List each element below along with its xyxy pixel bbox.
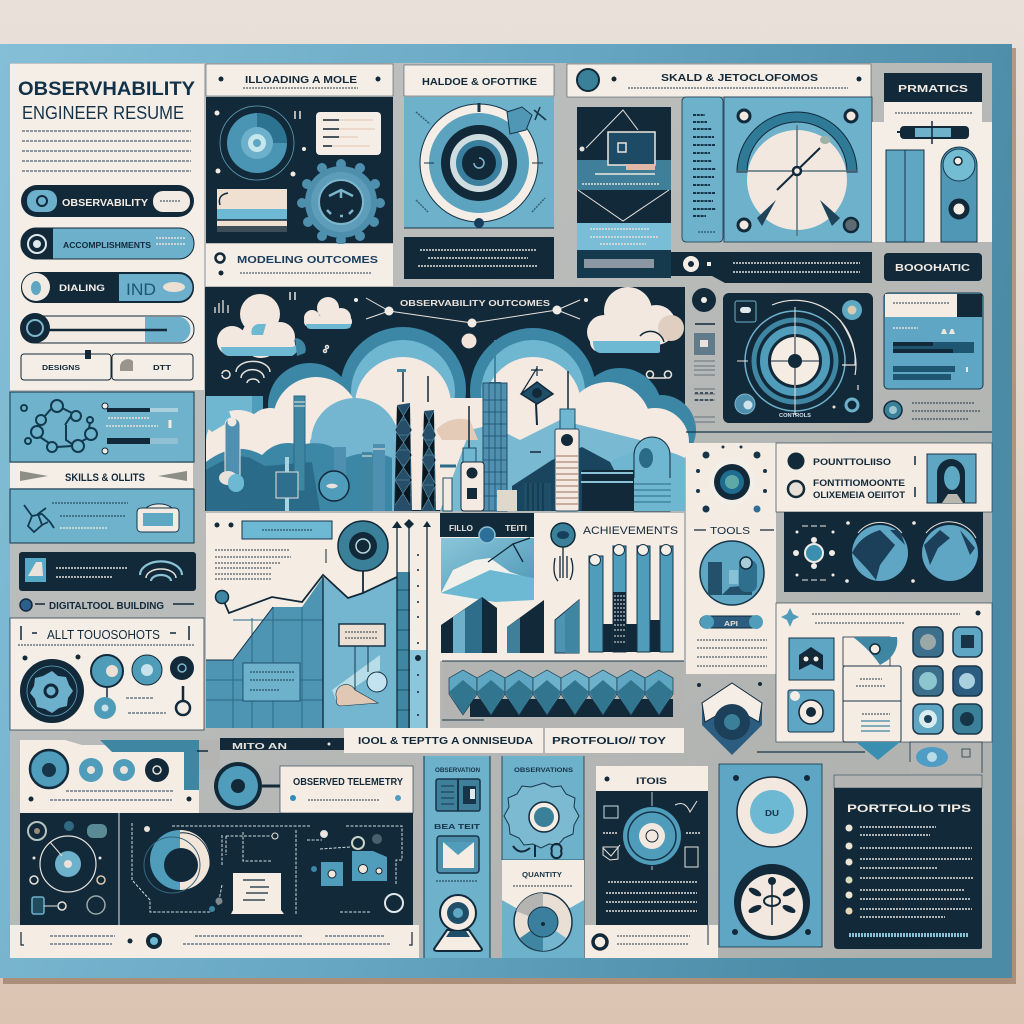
profile text: POUNTTOLIISO [813, 457, 891, 468]
icon: radial lens [696, 446, 767, 512]
label: dark mini bar: MITO AN [232, 741, 287, 751]
heading: skills: SKILLS & OLLITS [65, 472, 145, 484]
panel: sales header [567, 64, 871, 97]
icon: open book [436, 779, 480, 811]
icon: large ring [214, 762, 280, 810]
title: OBSERVHABILITY [18, 79, 195, 100]
trend line [222, 525, 427, 730]
heading: skills [10, 463, 193, 488]
icon: wifi [215, 292, 671, 383]
band: shield row [442, 661, 684, 728]
icon: ring [788, 452, 804, 470]
pill: dialing: DIALING [59, 283, 105, 293]
panel: achievements: FILLO [449, 524, 473, 533]
profile text: FONTITIOMOONTE [813, 478, 905, 489]
icon: lens large [30, 750, 68, 788]
heading: city: OBSERVABILITY OUTCOMES [400, 298, 550, 308]
icon: white dial [732, 775, 811, 935]
label: portfolio [545, 728, 684, 753]
label: bookmarks [884, 253, 982, 281]
skyline towers [219, 369, 428, 511]
dome and pipes [581, 437, 671, 511]
box: designs: DESIGNS [42, 365, 80, 372]
pill: dialing [21, 272, 194, 303]
panel: metrics chart [206, 513, 440, 730]
panel: observability header: HALDOE & OFOTTIKE [422, 77, 537, 88]
control pill [700, 615, 763, 629]
label: digital building [20, 599, 194, 612]
panel: metric card [884, 293, 983, 389]
icon: gear [297, 159, 385, 245]
icon: globe one [845, 521, 916, 583]
title: ENGINEER RESUME [22, 103, 184, 123]
icon: dark badge [692, 288, 716, 312]
icon: mail [437, 836, 479, 873]
dial group [28, 821, 107, 914]
panel: observed telemetry [280, 766, 413, 813]
app icon grid [913, 627, 982, 734]
pill: progress slider [20, 313, 194, 343]
card: metrics lines [316, 112, 381, 155]
avatar [927, 454, 976, 503]
clouds [217, 287, 684, 358]
panel: modeling outcomes: MODELING OUTCOMES [237, 255, 378, 266]
icon: gear dial [20, 659, 84, 723]
card: stacked [217, 189, 287, 232]
panel: pragmatics label [884, 73, 982, 102]
pill: achievements: ACCOMPLISHMENTS [63, 240, 151, 250]
panel: modeling header [206, 64, 393, 96]
chart label [242, 521, 332, 539]
icon: central lens [603, 792, 701, 870]
label: tools and testing: IOOL & TEPTTG A ONNISEUDA [358, 735, 533, 747]
panel: portfolio profile [776, 443, 992, 512]
panel: observed telemetry: OBSERVED TELEMETRY [293, 777, 403, 788]
banner: digital tools [19, 552, 196, 591]
panel: achievements: TEITI [505, 524, 527, 533]
panel: dial sidebar [719, 764, 822, 947]
profile text: OLIXEMEIA OEIITOT [813, 490, 905, 501]
connector line [757, 751, 865, 753]
sentinel diamond marker [521, 366, 553, 452]
icon: white dial: DU [765, 809, 779, 818]
panel: itops card [585, 766, 718, 958]
panel: portfolio tips [834, 775, 982, 949]
label: portfolio: PROTFOLIO// TOY [552, 735, 666, 747]
card: quantity [502, 860, 584, 958]
box: dtt: DTT [153, 363, 171, 372]
label: digital building: DIGITALTOOL BUILDING [49, 601, 164, 612]
panel: modeling header: ILLOADING A MOLE [245, 75, 357, 86]
label: bookmarks: BOOOHATIC [895, 263, 970, 274]
icon: target ring [788, 481, 804, 497]
panel: blue sidebar: BEA TEIT [434, 824, 481, 831]
chart notes [215, 550, 291, 579]
control pill: API [724, 621, 738, 628]
panel: dark monitor screen [577, 107, 671, 278]
panel: pragmatics label: PRMATICS [898, 84, 968, 95]
panel: achievements [440, 513, 684, 661]
panel: globes [784, 512, 983, 592]
panel: city skyline [205, 287, 696, 511]
puzzle icons [311, 834, 403, 912]
pill: observability: OBSERVABILITY [62, 197, 148, 209]
bar: stats text [671, 252, 872, 283]
panel: portfolio tips: PORTFOLIO TIPS [847, 803, 971, 815]
icon: globe two [922, 522, 978, 581]
icon: key badge [551, 523, 575, 581]
tall glass tower [483, 340, 517, 511]
thermometer bars [589, 544, 673, 652]
profile text [813, 456, 915, 501]
circuit lines [132, 823, 402, 914]
label: tools and testing [344, 728, 543, 753]
panel: observability text [404, 237, 554, 279]
heading: tools [694, 525, 774, 537]
panel: telemetry dashboard [20, 813, 413, 925]
panel: text strip [682, 97, 723, 242]
card: camera [788, 690, 834, 732]
tips bullet list [846, 824, 973, 935]
box: designs [21, 350, 111, 380]
hills [206, 398, 685, 511]
panel: monitoring target: CONTROLS [779, 413, 811, 419]
picture: mountains [441, 527, 534, 605]
summary text block [22, 131, 191, 171]
small towers [440, 371, 579, 511]
icon: radial dial [220, 106, 294, 180]
badge with text [884, 401, 980, 419]
folded note [843, 637, 901, 742]
icon: round badge [577, 69, 599, 91]
pie chart [514, 893, 572, 951]
connector network [354, 298, 588, 328]
panel: tools [686, 443, 776, 674]
panel: title and profile column [10, 64, 204, 390]
pill: dialing: IND [126, 280, 156, 299]
heading: achievements: ACHIEVEMENTS [583, 525, 678, 537]
icon: gear with ring [504, 783, 579, 858]
icon: network symbol [734, 864, 810, 940]
panel: observability header [404, 65, 554, 96]
card: mask [789, 638, 834, 680]
panel: all touchpoints [10, 618, 204, 730]
panel: gauge [724, 97, 872, 242]
note card [231, 873, 284, 914]
background arches [268, 327, 696, 465]
note box [243, 663, 300, 701]
panel: sales header: SKALD & JETOCLOFOMOS [661, 73, 818, 84]
icon: lens [132, 655, 162, 685]
panel: notch card with circles [20, 740, 220, 813]
icon: hexagon shield [697, 682, 762, 755]
lattice towers [394, 403, 436, 511]
icon: toggle circle [91, 655, 123, 719]
panel: modeling outcomes [206, 244, 393, 286]
box: dtt [112, 354, 193, 380]
area chart [206, 572, 427, 728]
panel: monitoring target [686, 288, 992, 432]
panel: skills detail [10, 489, 194, 543]
icon: dark key [170, 656, 194, 715]
card: quantity: QUANTITY [522, 872, 562, 879]
bar silhouettes [441, 597, 579, 653]
panel: blue sidebar [424, 756, 490, 958]
label: dark mini bar [220, 738, 344, 751]
icon: camera disc [700, 541, 764, 605]
pill: achievements [20, 228, 194, 259]
pill: observability [21, 185, 194, 217]
callout box [339, 624, 385, 692]
panel: gear sidebar: OBSERVATIONS [514, 768, 573, 774]
icon: spiral lens [338, 521, 388, 571]
panel: small badge box [910, 742, 982, 773]
panel: blue sidebar: OBSERVATION [435, 768, 480, 774]
pointer triangle [856, 742, 900, 760]
icon: network hub [793, 526, 835, 580]
panel: pragmatics widgets [872, 102, 992, 242]
panel: footer strip [10, 925, 419, 958]
panel: skills network [10, 392, 194, 462]
panel: target lens [404, 97, 554, 228]
donut chart [144, 826, 210, 893]
icon: webcam [434, 895, 482, 951]
icon: status dots [79, 758, 169, 782]
panel: gear sidebar [502, 756, 584, 958]
foreground cloud bank [206, 357, 689, 510]
panel: modeling dashboard [206, 97, 393, 245]
panel: itops card: ITOIS [636, 776, 667, 786]
panel: portfolio icons [776, 603, 992, 742]
heading: tools: TOOLS [710, 525, 750, 537]
panel: all touchpoints: ALLT TOUOSOHOTS [47, 628, 160, 642]
title [18, 79, 195, 123]
